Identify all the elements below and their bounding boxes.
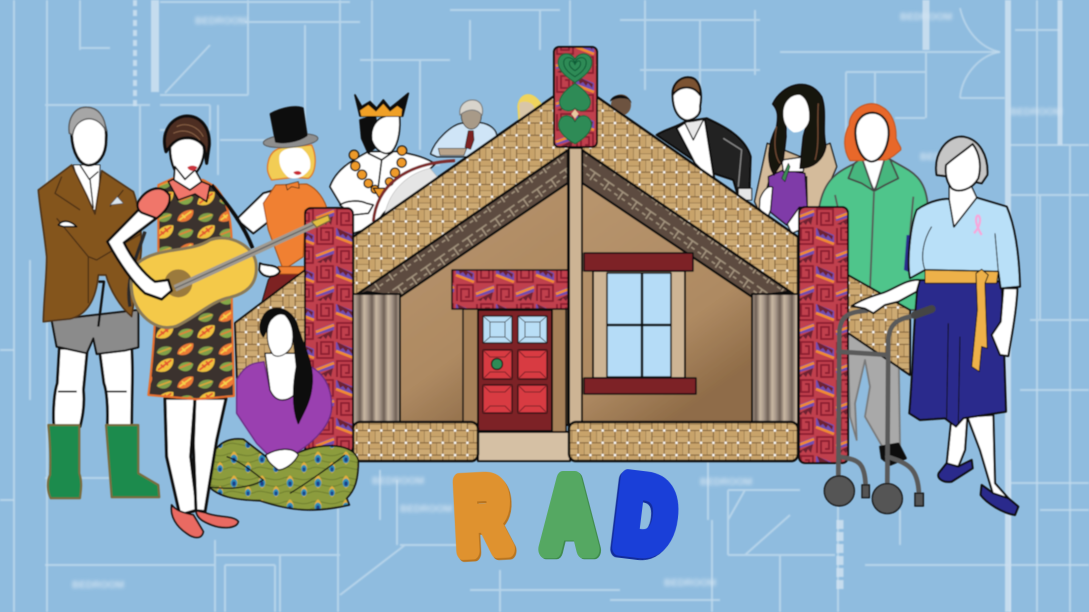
back row people: [237, 77, 930, 465]
blueprint labels: BEDROOM: [1010, 107, 1062, 118]
door surround: [463, 309, 566, 432]
shirt: [73, 165, 100, 210]
face: [170, 133, 204, 179]
left dark band: [353, 150, 568, 297]
older woman's arm resting on walker: [852, 280, 920, 313]
necktie line: [80, 165, 98, 208]
face: [946, 144, 980, 191]
left leg: [54, 348, 87, 427]
door knob: [492, 358, 502, 370]
shorts: [52, 310, 138, 354]
skirt: [909, 280, 1006, 427]
brown hair: [165, 116, 209, 163]
collar: [168, 178, 210, 202]
right wall: [582, 183, 752, 425]
legs: [947, 417, 967, 467]
letter R: R: [453, 459, 511, 573]
right boot: [106, 425, 159, 497]
person: older woman in blue blouse: [909, 137, 1020, 515]
gold sash: [925, 270, 998, 283]
right wing: [848, 275, 910, 375]
person: dark haired man: [610, 94, 632, 116]
right dark band: [582, 150, 798, 297]
door glass panels: [483, 316, 547, 343]
guitar: [131, 215, 330, 328]
person: reading man: [431, 100, 497, 157]
neck: [949, 177, 977, 227]
black hair: [260, 308, 312, 423]
peacock trousers: [205, 439, 358, 510]
blueprint labels: BEDROOM: [342, 168, 394, 179]
person: woman with long dark hair: [755, 84, 837, 233]
blueprint labels: BEDROOM: [400, 504, 452, 515]
head: [72, 113, 106, 165]
left red pillar: [305, 208, 353, 453]
left wing: [235, 270, 305, 435]
house: [235, 47, 910, 463]
top carved pillar with hearts: [554, 47, 597, 147]
left corrugated column: [353, 294, 400, 424]
left boot: [48, 425, 81, 498]
grey hair: [69, 107, 106, 135]
blueprint labels: BEDROOM: [920, 152, 972, 163]
walker frame: [824, 309, 932, 514]
lips: [187, 166, 197, 171]
blueprint labels: BEDROOM: [900, 12, 952, 23]
right base weave: [569, 422, 798, 461]
blueprint labels: BEDROOM: [372, 476, 424, 487]
shoes: [938, 460, 973, 482]
person: blond figure: [517, 94, 541, 120]
walker wheels: [824, 476, 923, 514]
door: [478, 310, 552, 431]
RAD block letters: [453, 457, 681, 575]
right leg: [99, 348, 132, 427]
centre post: [569, 148, 582, 433]
person: red haired person in green shirt: [819, 104, 930, 465]
pink ribbon: [974, 215, 982, 235]
shoes: [171, 505, 203, 537]
sash tail: [972, 269, 988, 372]
person: man in black suit: [657, 77, 752, 200]
right red pillar: [799, 207, 848, 463]
neck: [265, 353, 298, 400]
person: woman in leaf dress with guitar: [107, 116, 330, 537]
blouse: [909, 198, 1020, 288]
arm and hand on guitar: [107, 208, 172, 299]
letter D: D: [611, 457, 681, 575]
right arm: [992, 288, 1017, 356]
grey hair: [936, 137, 987, 183]
doorstep: [478, 432, 570, 461]
person: man in brown jacket and green boots: [38, 107, 159, 498]
blueprint labels: BEDROOM: [72, 580, 124, 591]
sleeve: [137, 188, 170, 218]
person: seated woman in purple with peacock trousers: [205, 308, 358, 510]
jacket: [38, 165, 141, 322]
letter A: A: [543, 459, 595, 571]
strap: [212, 185, 253, 248]
left base weave: [353, 422, 478, 461]
roof weave: [353, 97, 798, 297]
blueprint labels: BEDROOM: [195, 16, 247, 27]
left wall: [400, 183, 568, 425]
lintel pattern: [452, 270, 568, 309]
door red panels: [483, 350, 547, 413]
leaf dress: [148, 178, 234, 399]
legs: [165, 398, 197, 515]
face: [267, 314, 293, 356]
window: [584, 253, 696, 394]
neck: [174, 167, 202, 190]
right corrugated column: [752, 294, 798, 424]
blueprint labels: BEDROOM: [700, 477, 752, 488]
hands: [266, 449, 298, 470]
person: king with crown and orange beads: [330, 93, 455, 233]
purple top: [237, 362, 332, 457]
blueprint labels: BEDROOM: [664, 578, 716, 589]
person: woman in top hat: [237, 107, 328, 303]
